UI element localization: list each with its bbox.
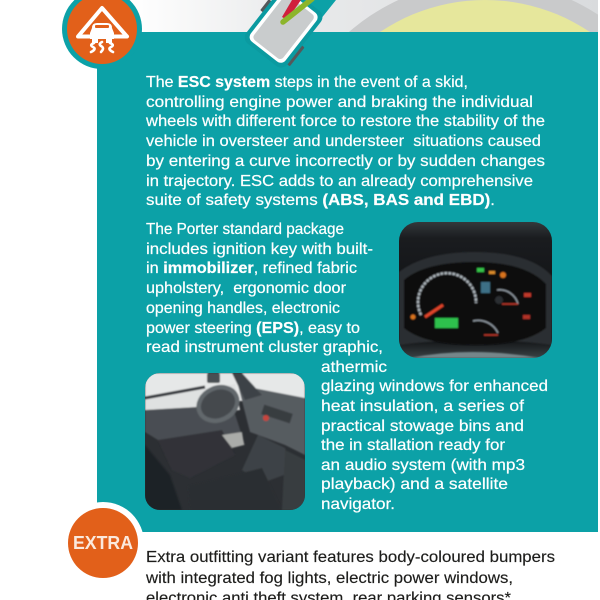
text block: ESC system: by entering a curve incorrectly or by sudden changes [146,153,545,170]
badge: EXTRA [62,502,144,584]
text block: Extra outfitting: with integrated fog lights, electric power windows, [145,570,513,587]
header background with arcs [190,0,598,32]
badge: EXTRA: EXTRA [73,533,133,553]
text block: Extra outfitting [145,549,555,600]
text block: Porter standard package: navigator. [321,496,395,513]
text block: ESC system: The ESC system steps in the event of a skid, [146,74,468,91]
text block: ESC system: suite of safety systems (ABS, BAS and EBD) . [146,192,495,209]
text block: Porter standard package [146,221,548,513]
text block: Porter standard package: read instrument cluster graphic, [146,339,383,356]
icon: ESC skid warning badge [62,0,142,69]
text block: ESC system: vehicle in oversteer and understeer situations caused [146,133,541,150]
text block: ESC system: in trajectory. ESC adds to an already comprehensive [146,173,533,190]
text block: Porter standard package: in immobilizer, refined fabric [146,260,357,277]
teal panel [97,32,598,532]
text block: Porter standard package: power steering (EPS), easy to [146,320,360,337]
text block: Porter standard package: athermic [321,359,387,376]
text block: Porter standard package: includes ignition key with built- [146,241,373,258]
text block: Porter standard package: an audio system (with mp3 [321,457,525,474]
text block: Extra outfitting: Extra outfitting variant features body-coloured bumpers [146,549,555,566]
text block: Porter standard package: upholstery, ergonomic door [146,280,346,297]
text block: Porter standard package: glazing windows for enhanced [321,378,548,395]
icon: phone device [239,0,336,73]
text block: Porter standard package: playback) and a satellite [321,476,508,493]
text block: Porter standard package: opening handles, electronic [146,300,340,317]
text block: ESC system: controlling engine power and braking the individual [146,94,533,111]
text block: ESC system [145,74,545,209]
photo: instrument cluster [399,222,552,358]
text block: ESC system: wheels with different force to restore the stability of the [145,113,545,130]
photo: cabin interior [145,373,305,510]
text block: Porter standard package: the in stallation ready for [321,437,505,454]
text block: Porter standard package: heat insulation, a series of [321,398,525,415]
text block: Porter standard package: practical stowage bins and [321,418,524,435]
text block: Porter standard package: The Porter standard package [146,221,344,238]
